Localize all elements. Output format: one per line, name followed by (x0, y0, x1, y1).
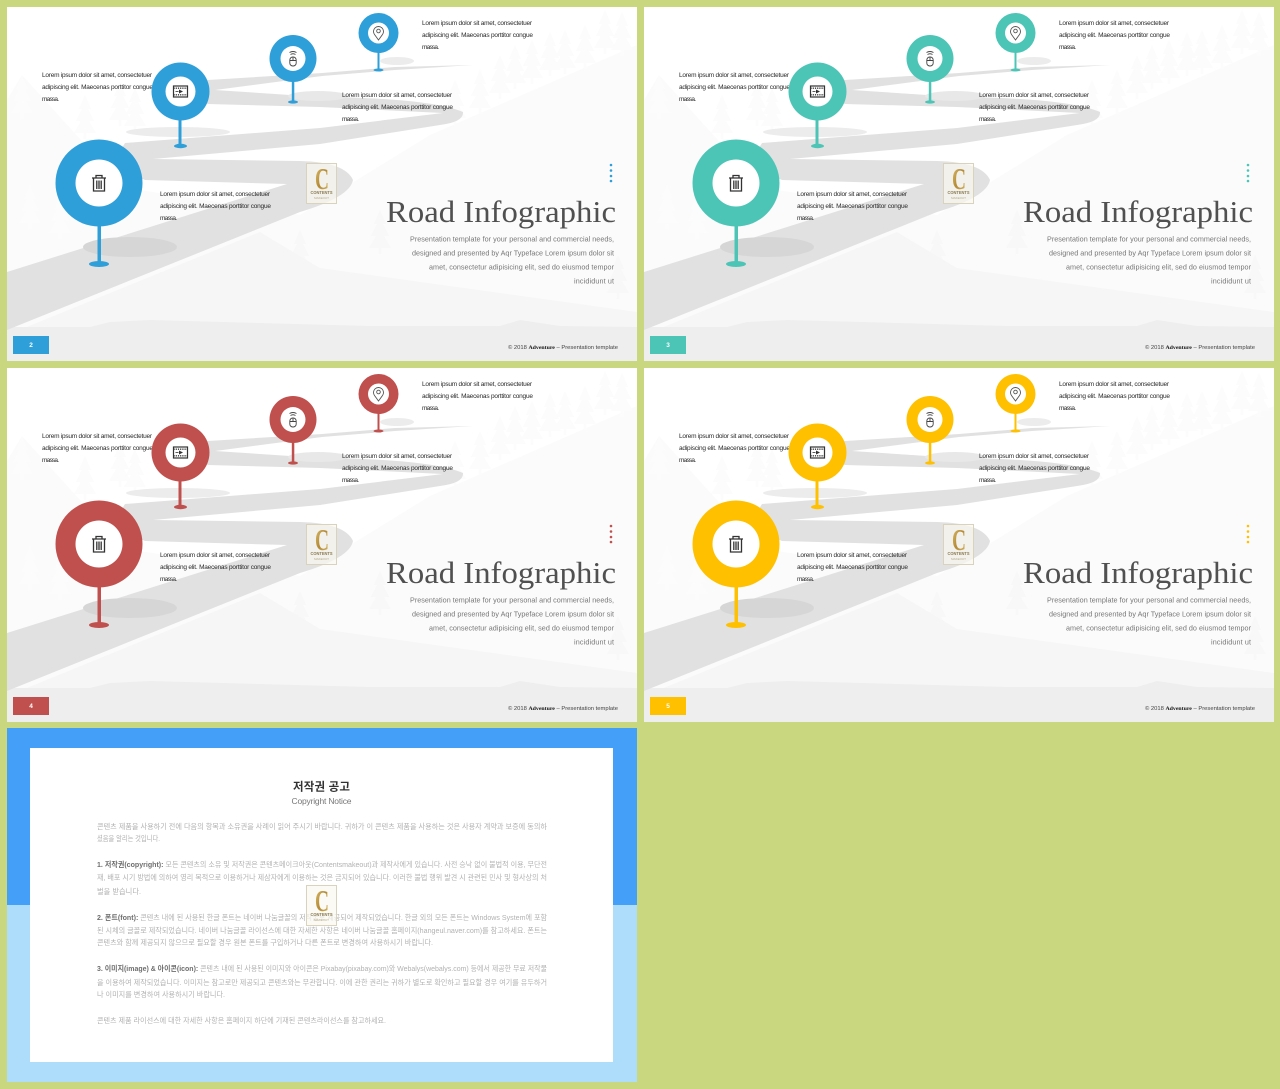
text block: pin 4 caption: massa. (422, 44, 439, 51)
pin: trash icon (692, 140, 780, 267)
text block: pin 2 caption: adipiscing elit. Maecenas porttitor congue (42, 84, 153, 91)
text block: pin 4 caption: massa. (1059, 405, 1076, 412)
text block: pin 3 caption (342, 453, 453, 484)
text block: pin 4 caption (1059, 20, 1170, 51)
text block: pin 1 caption: Lorem ipsum dolor sit amet, consectetuer (797, 191, 908, 198)
description: designed and presented by Aqr Typeface Lorem ipsum dolor sit (1049, 248, 1251, 258)
slide 4: red road infographic (7, 368, 637, 722)
text block: pin 4 caption: Lorem ipsum dolor sit amet, consectetuer (422, 20, 533, 27)
title: Road Infographic (386, 555, 616, 590)
pin: film icon (152, 424, 210, 509)
text block: pin 1 caption: massa. (160, 576, 177, 583)
section 1: copyright: 벌을 받습니다. (97, 886, 141, 896)
pin: location icon (358, 13, 398, 72)
dots (1247, 525, 1249, 543)
page number badge: 3 (666, 342, 670, 349)
page number badge: 4 (29, 703, 33, 710)
text block: pin 2 caption: adipiscing elit. Maecenas porttitor congue (679, 84, 790, 91)
text block: pin 4 caption: Lorem ipsum dolor sit amet, consectetuer (1059, 20, 1170, 27)
text block: pin 4 caption (422, 381, 533, 412)
page number badge (13, 336, 49, 354)
description: Presentation template for your personal and commercial needs, (410, 596, 614, 604)
text block: pin 2 caption: adipiscing elit. Maecenas porttitor congue (679, 445, 790, 452)
copyright subheading: Copyright Notice (292, 796, 352, 806)
description: designed and presented by Aqr Typeface Lorem ipsum dolor sit (412, 248, 614, 258)
page number badge (13, 697, 49, 715)
text block: pin 3 caption: Lorem ipsum dolor sit amet, consectetuer (979, 92, 1090, 99)
text block: pin 1 caption (160, 191, 271, 222)
text block: pin 2 caption: Lorem ipsum dolor sit amet, consectetuer (679, 433, 790, 440)
pin: trash icon (56, 500, 142, 628)
text block: pin 3 caption: adipiscing elit. Maecenas porttitor congue (342, 465, 453, 472)
road scene background (7, 368, 637, 722)
logo (944, 161, 974, 204)
slide 3: teal road infographic (644, 7, 1274, 361)
section 2: font: 콘텐츠와 함께 제공되지 않으므로 필요할 경우 원본 폰트를 구입하거나 다른 폰트로 변경하여 사용하시기 바랍니다. (97, 937, 433, 947)
slide 2: blue road infographic (7, 7, 637, 361)
text block: pin 1 caption: adipiscing elit. Maecenas porttitor congue (160, 203, 271, 210)
page number badge: 5 (666, 703, 670, 710)
description (1047, 596, 1252, 646)
page number badge (650, 336, 686, 354)
text block: pin 4 caption: massa. (1059, 44, 1076, 51)
description: designed and presented by Aqr Typeface Lorem ipsum dolor sit (1049, 610, 1251, 618)
closing note: 콘텐츠 제품 라이선스에 대한 자세한 사항은 홈페이지 하단에 기재된 콘텐츠라이선스를 참고하세요. (97, 1015, 386, 1025)
title: Road Infographic (386, 194, 616, 229)
road scene background (644, 7, 1274, 361)
description: amet, consectetur adipisicing elit, sed do eiusmod tempor (429, 624, 615, 632)
panel: copyright notice (7, 728, 637, 1082)
text block: pin 4 caption: massa. (422, 405, 439, 412)
description: incididunt ut (1211, 276, 1251, 286)
title: Road Infographic (1023, 555, 1253, 590)
section 2: font: 2. 폰트(font): 콘텐츠 내에 된 사용된 한글 폰트는 네이버 나눔글꼴의 저작물로 제공되어 제작되었습니다. 한글 외의 모든 폰트는 Windows System에 포함 (97, 912, 547, 922)
description: Presentation template for your personal and commercial needs, (410, 234, 614, 244)
text block: pin 1 caption: Lorem ipsum dolor sit amet, consectetuer (160, 191, 271, 198)
section 1: copyright: 재, 배포 시기 방법에 의하여 영리 목적으로 이용하거나 제삼자에게 이용하는 것은 금지되어 있습니다. 이러한 불법 행위 발견 시 관련된 민사 및 형사상의 처 (97, 872, 547, 882)
footer: © 2018 Adventure – Presentation template (1145, 344, 1255, 351)
footer: © 2018 Adventure – Presentation template (508, 344, 618, 351)
pin: film icon (788, 62, 846, 148)
pin: film icon (152, 62, 210, 148)
pin: trash icon (56, 140, 142, 267)
pin: mouse icon (906, 396, 954, 465)
logo (306, 522, 336, 564)
text block: pin 4 caption: adipiscing elit. Maecenas porttitor congue (1059, 32, 1170, 39)
text block: pin 1 caption: massa. (797, 215, 814, 222)
text block: pin 4 caption: Lorem ipsum dolor sit amet, consectetuer (1059, 381, 1170, 388)
page number badge: 2 (29, 342, 33, 349)
pin: trash icon (692, 500, 780, 628)
logo (944, 522, 974, 564)
pin: location icon (996, 13, 1036, 72)
text block: pin 1 caption: adipiscing elit. Maecenas porttitor congue (797, 564, 908, 571)
intro paragraph: 콘텐츠 제품을 사용하기 전에 다음의 항목과 소유권을 사례이 읽어 주시기 바랍니다. 귀하가 이 콘텐츠 제품을 사용하는 것은 사용자 계약과 보증에 동의하 (97, 821, 547, 831)
description: Presentation template for your personal and commercial needs, (1047, 234, 1251, 244)
section 1: copyright: 1. 저작권(copyright): 모든 콘텐츠의 소유 및 저작권은 콘텐츠메이크아웃(Contentsmakeout)과 제작사에게 있습니다. 사전 승낙 없이 불법적 이용, 무단전 (97, 859, 547, 869)
text block: pin 3 caption: massa. (979, 477, 996, 484)
road scene background (7, 7, 637, 361)
description: incididunt ut (574, 638, 614, 646)
text block: pin 3 caption: massa. (342, 477, 359, 484)
description: amet, consectetur adipisicing elit, sed do eiusmod tempor (1066, 262, 1252, 272)
dots (610, 164, 612, 182)
text block: pin 4 caption (422, 20, 533, 51)
text block: pin 4 caption: Lorem ipsum dolor sit amet, consectetuer (422, 381, 533, 388)
pin: location icon (358, 374, 398, 432)
text block: pin 3 caption: Lorem ipsum dolor sit amet, consectetuer (979, 453, 1090, 460)
pin: mouse icon (906, 35, 954, 104)
text block: pin 2 caption (679, 433, 790, 464)
text block: pin 1 caption: adipiscing elit. Maecenas porttitor congue (797, 203, 908, 210)
text block: pin 1 caption: adipiscing elit. Maecenas porttitor congue (160, 564, 271, 571)
text block: pin 3 caption (979, 453, 1090, 484)
footer: © 2018 Adventure – Presentation template (1145, 705, 1255, 712)
text block: pin 2 caption: Lorem ipsum dolor sit amet, consectetuer (679, 72, 790, 79)
description: amet, consectetur adipisicing elit, sed do eiusmod tempor (1066, 624, 1252, 632)
description (410, 234, 615, 286)
section 2: font: 된 시체의 글꼴로 제작되었습니다. 네이버 나눔글꼴 라이선스에 대한 자세한 사항은 네이버 나눔글꼴 홈페이지(hangeul.naver.com)를 참고하세요. 폰트는 (97, 925, 547, 935)
title: Road Infographic (1023, 194, 1253, 229)
logo watermark (306, 883, 336, 926)
text block: pin 1 caption (797, 191, 908, 222)
text block: pin 4 caption: adipiscing elit. Maecenas porttitor congue (422, 393, 533, 400)
text block: pin 2 caption: massa. (42, 457, 59, 464)
text block: pin 2 caption (42, 433, 153, 464)
intro paragraph (97, 821, 547, 843)
text block: pin 2 caption: massa. (679, 96, 696, 103)
text block: pin 1 caption (797, 552, 908, 583)
text block: pin 2 caption (42, 72, 153, 103)
section 1: copyright (97, 859, 547, 896)
description: designed and presented by Aqr Typeface Lorem ipsum dolor sit (412, 610, 614, 618)
text block: pin 3 caption: massa. (979, 116, 996, 123)
text block: pin 2 caption: massa. (679, 457, 696, 464)
text block: pin 3 caption: adipiscing elit. Maecenas porttitor congue (979, 104, 1090, 111)
footer: © 2018 Adventure – Presentation template (508, 705, 618, 712)
description (1047, 234, 1252, 286)
copyright heading: 저작권 공고 (293, 780, 350, 794)
text block: pin 1 caption: Lorem ipsum dolor sit amet, consectetuer (797, 552, 908, 559)
text block: pin 3 caption: Lorem ipsum dolor sit amet, consectetuer (342, 92, 453, 99)
text block: pin 1 caption: massa. (160, 215, 177, 222)
text block: pin 3 caption (979, 92, 1090, 123)
description: incididunt ut (574, 276, 614, 286)
text block: pin 1 caption (160, 552, 271, 583)
section 3: image and icon: 3. 이미지(image) & 아이콘(icon): 콘텐츠 내에 된 사용된 이미지와 아이콘은 Pixabay(pixabay.com)와 Webalys(webalys.com) 등에서 제공한 무료 저작물 (97, 963, 547, 973)
page number badge (650, 697, 686, 715)
text block: pin 3 caption: adipiscing elit. Maecenas porttitor congue (979, 465, 1090, 472)
slide 5: yellow road infographic (644, 368, 1274, 722)
dots (1247, 164, 1249, 182)
text block: pin 4 caption (1059, 381, 1170, 412)
section 3: image and icon: 을 이용하여 제작되었습니다. 이미지는 참고로만 제공되고 콘텐츠와는 무관합니다. 이에 관한 권리는 귀하가 별도로 확인하고 필요할 경우 여기를 유두하거 (97, 977, 547, 987)
pin: location icon (996, 374, 1036, 432)
text block: pin 1 caption: massa. (797, 576, 814, 583)
dots (610, 525, 612, 543)
text block: pin 2 caption (679, 72, 790, 103)
text block: pin 3 caption: massa. (342, 116, 359, 123)
pin: film icon (788, 424, 846, 509)
intro paragraph: 셨음을 알리는 것입니다. (97, 833, 160, 843)
section 2: font (97, 912, 547, 947)
logo (306, 161, 336, 204)
section 3: image and icon (97, 963, 547, 999)
pin: mouse icon (270, 396, 316, 465)
description (410, 596, 615, 646)
text block: pin 4 caption: adipiscing elit. Maecenas porttitor congue (422, 32, 533, 39)
text block: pin 2 caption: massa. (42, 96, 59, 103)
text block: pin 4 caption: adipiscing elit. Maecenas porttitor congue (1059, 393, 1170, 400)
text block: pin 3 caption: Lorem ipsum dolor sit amet, consectetuer (342, 453, 453, 460)
section 3: image and icon: 나 이미지를 변경하여 사용하시기 바랍니다. (97, 989, 225, 999)
text block: pin 2 caption: Lorem ipsum dolor sit amet, consectetuer (42, 72, 153, 79)
text block: pin 2 caption: adipiscing elit. Maecenas porttitor congue (42, 445, 153, 452)
road scene background (644, 368, 1274, 722)
text block: pin 2 caption: Lorem ipsum dolor sit amet, consectetuer (42, 433, 153, 440)
text block: pin 1 caption: Lorem ipsum dolor sit amet, consectetuer (160, 552, 271, 559)
description: amet, consectetur adipisicing elit, sed do eiusmod tempor (429, 262, 615, 272)
description: Presentation template for your personal and commercial needs, (1047, 596, 1251, 604)
pin: mouse icon (270, 35, 316, 104)
description: incididunt ut (1211, 638, 1251, 646)
text block: pin 3 caption (342, 92, 453, 123)
text block: pin 3 caption: adipiscing elit. Maecenas porttitor congue (342, 104, 453, 111)
